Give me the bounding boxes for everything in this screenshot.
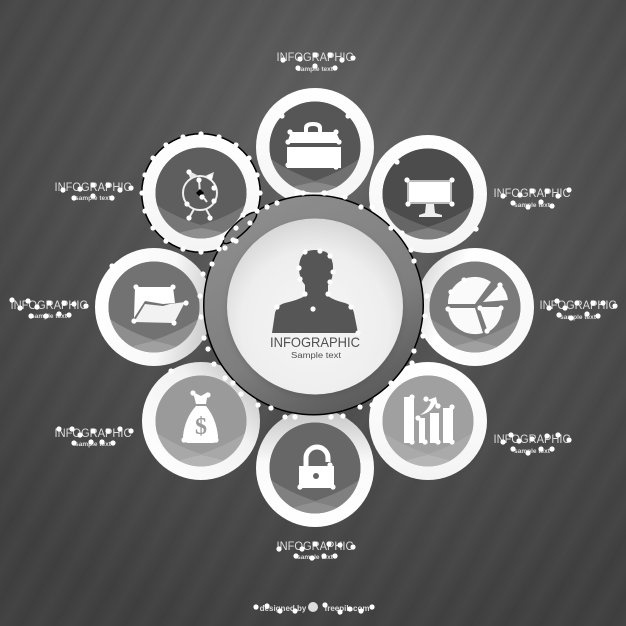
panel: briefcase circle (256, 88, 374, 206)
text: monitor label: sample text (514, 202, 551, 209)
panel: bar chart circle (369, 362, 487, 480)
text: top label: sample text (297, 66, 334, 73)
text: folder label: INFOGRAPHIC (10, 300, 88, 312)
icon: money bag (183, 392, 218, 443)
text: money bag label: sample text (75, 441, 112, 448)
icon: folder (134, 287, 185, 323)
icon: briefcase (287, 122, 341, 168)
text: clock label (54, 182, 132, 202)
panel: central disc (203, 194, 424, 416)
text: top label (276, 52, 354, 73)
text: money bag label (54, 428, 132, 448)
icon: alarm clock (183, 170, 217, 218)
footer credit (260, 602, 369, 613)
icon: monitor (407, 180, 452, 217)
icon: pie chart (448, 277, 508, 334)
panel: folder circle (95, 248, 213, 366)
text: lock label (276, 541, 354, 561)
text: lock label: sample text (297, 554, 334, 561)
icon: money bag: $ (195, 414, 207, 440)
text: money bag label: INFOGRAPHIC (54, 428, 132, 440)
text: clock label: INFOGRAPHIC (54, 182, 132, 194)
footer credit: designed by (260, 604, 307, 613)
text: folder label: sample text (31, 313, 68, 320)
panel: clock circle (141, 133, 261, 253)
text: pie chart label (540, 300, 616, 321)
text: lock label: INFOGRAPHIC (276, 541, 354, 553)
icon: lock (299, 447, 334, 488)
heading: centre label: Sample text (291, 351, 342, 360)
text: pie chart label: sample text (560, 314, 597, 321)
footer credit: freepik.com (325, 604, 369, 613)
panel: money bag circle (142, 362, 260, 480)
text: pie chart label: INFOGRAPHIC (540, 300, 616, 312)
panel: pie chart circle (416, 248, 534, 366)
text: folder label (10, 300, 88, 320)
heading: centre label: INFOGRAPHIC (270, 334, 360, 350)
heading: centre label (270, 334, 360, 360)
panel: lock circle (256, 409, 374, 527)
icon: person silhouette (272, 250, 358, 333)
icon: bar chart (404, 397, 453, 443)
text: monitor label (494, 188, 570, 209)
text: bar chart label: INFOGRAPHIC (494, 434, 570, 446)
text: clock label: sample text (75, 195, 112, 202)
panel: monitor circle (369, 135, 487, 253)
text: top label: INFOGRAPHIC (276, 52, 354, 64)
text: monitor label: INFOGRAPHIC (494, 188, 570, 200)
text: bar chart label: sample text (514, 448, 551, 455)
text: bar chart label (494, 434, 570, 455)
